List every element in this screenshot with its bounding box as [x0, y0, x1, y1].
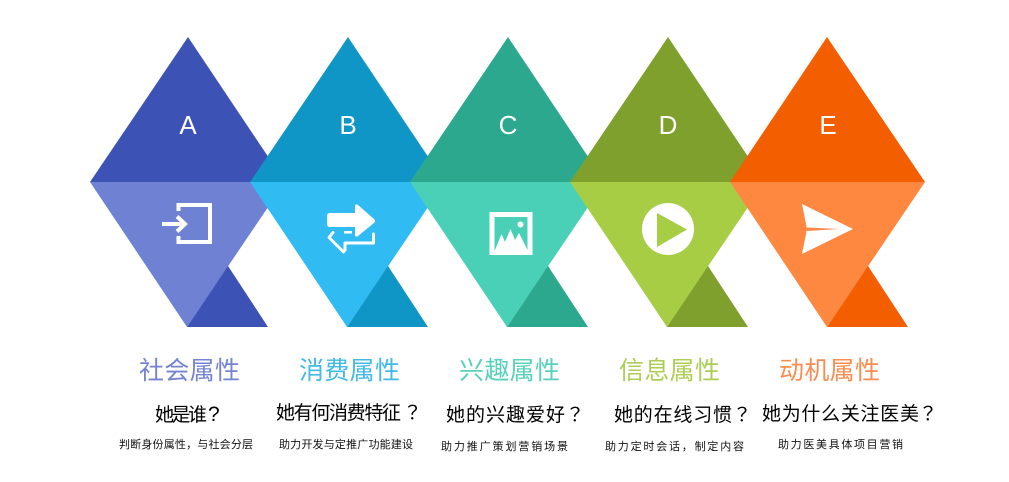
- letter D: D: [659, 110, 677, 140]
- question B: 她有何消费特征: [276, 402, 401, 424]
- description C: 助力推广策划营销场景: [441, 439, 568, 453]
- lower triangle E: [730, 182, 925, 327]
- description B: 助力开发与定推广功能建设: [279, 437, 413, 451]
- lower triangle D: [570, 182, 765, 327]
- lower triangle C: [410, 182, 605, 327]
- question C: 她的兴趣爱好: [446, 404, 565, 426]
- question B: ？: [403, 398, 422, 425]
- question E: 她为什么关注医美: [762, 403, 919, 425]
- title D: 信息属性: [619, 357, 720, 385]
- small triangle B: [347, 266, 428, 327]
- small triangle D: [667, 266, 748, 327]
- question D: 她的在线习惯: [614, 404, 732, 426]
- title E: 动机属性: [779, 357, 880, 385]
- column A text: [119, 357, 253, 451]
- letter C: C: [499, 110, 517, 140]
- question E: ？: [918, 399, 938, 426]
- title A: 社会属性: [139, 357, 240, 385]
- description A: 判断身份属性，与社会分层: [119, 437, 253, 451]
- diamond A: social attributes: [90, 37, 285, 327]
- icon: paper plane: [802, 204, 853, 254]
- question D: ？: [732, 400, 752, 427]
- small triangle E: [827, 266, 908, 327]
- question A: ?: [208, 403, 220, 426]
- letter E: E: [819, 110, 837, 140]
- title C: 兴趣属性: [459, 357, 560, 385]
- column C text: [441, 357, 585, 453]
- diamond E: motivation attributes: [730, 37, 925, 327]
- upper triangle C: [410, 37, 605, 182]
- upper triangle B: [250, 37, 445, 182]
- diamond D: information attributes: [570, 37, 765, 327]
- question C: [446, 400, 585, 427]
- lower triangle A: [90, 182, 285, 327]
- diamond C: interest attributes: [410, 37, 605, 327]
- letter B: B: [339, 110, 357, 140]
- description E: 助力医美具体项目营销: [778, 437, 903, 451]
- title B: 消费属性: [299, 357, 400, 385]
- question A: 她是谁: [155, 404, 207, 426]
- upper triangle E: [730, 37, 925, 182]
- icon: play button: [642, 203, 694, 255]
- upper triangle D: [570, 37, 765, 182]
- small triangle C: [507, 266, 588, 327]
- letter A: A: [179, 110, 197, 140]
- diamond B: consumption attributes: [250, 37, 445, 327]
- column B text: [276, 357, 422, 451]
- question C: ？: [566, 400, 585, 427]
- icon: sign-in door: [162, 205, 210, 242]
- column D text: [605, 357, 752, 453]
- lower triangle B: [250, 182, 445, 327]
- description D: 助力定时会话，制定内容: [605, 439, 744, 453]
- column E text: [762, 357, 938, 451]
- question E: [762, 399, 938, 426]
- small triangle A: [187, 266, 268, 327]
- icon: exchange arrows: [327, 204, 375, 252]
- upper triangle A: [90, 37, 285, 182]
- question B: [276, 398, 422, 425]
- question D: [614, 400, 752, 427]
- icon: picture: [492, 214, 530, 252]
